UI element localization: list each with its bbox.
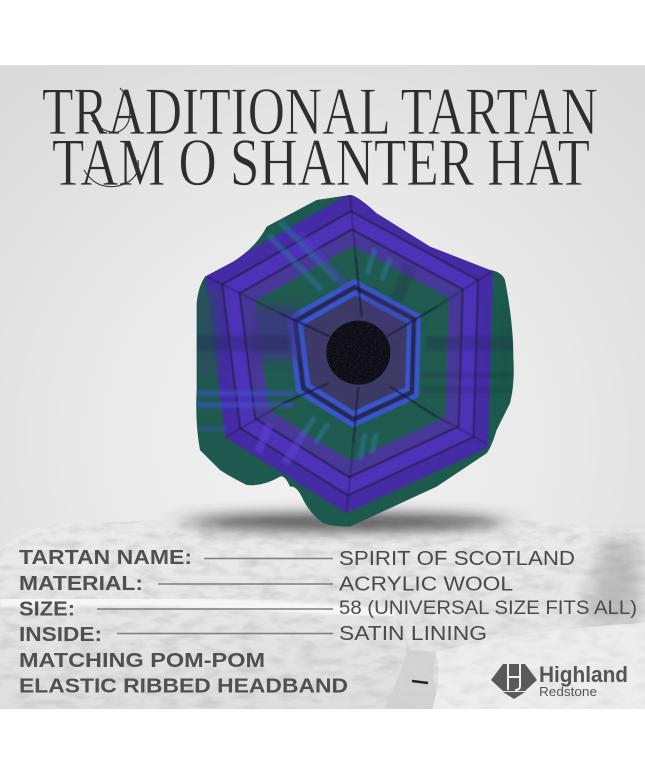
panel seams bbox=[207, 195, 492, 512]
hat base cloth bbox=[190, 190, 520, 530]
hat shadow bbox=[185, 513, 505, 531]
spec labels: MATCHING POM-POM bbox=[19, 650, 265, 672]
plaid cross bands bbox=[197, 222, 515, 463]
title swashes bbox=[84, 88, 138, 187]
spec values: 58 (UNIVERSAL SIZE FITS ALL) bbox=[339, 598, 637, 619]
logo wordmark: Redstone bbox=[539, 684, 597, 699]
concentric plaid bands bbox=[205, 193, 493, 513]
spec labels: SIZE: bbox=[19, 598, 75, 620]
logo mark bbox=[491, 664, 537, 699]
logo wordmark bbox=[539, 662, 628, 699]
title bbox=[42, 73, 598, 200]
stone plinth bbox=[0, 515, 645, 709]
plaid colour patches bbox=[197, 290, 513, 390]
spec labels: MATERIAL: bbox=[19, 573, 143, 595]
spec labels bbox=[19, 547, 348, 698]
spec values: ACRYLIC WOOL bbox=[339, 574, 513, 596]
spec values: SPIRIT OF SCOTLAND bbox=[339, 548, 575, 570]
spec labels: TARTAN NAME: bbox=[19, 547, 192, 569]
twill weave overlay bbox=[190, 190, 520, 530]
pom-pom bbox=[326, 321, 390, 385]
tartan hat bbox=[190, 190, 520, 530]
spec labels: ELASTIC RIBBED HEADBAND bbox=[19, 676, 348, 698]
logo: Highland Redstone bbox=[491, 662, 628, 699]
spec values: SATIN LINING bbox=[339, 623, 487, 645]
logo wordmark: Highland bbox=[539, 662, 628, 687]
spec labels: INSIDE: bbox=[19, 624, 102, 646]
spec values bbox=[339, 548, 637, 645]
spec leader lines bbox=[97, 558, 333, 634]
